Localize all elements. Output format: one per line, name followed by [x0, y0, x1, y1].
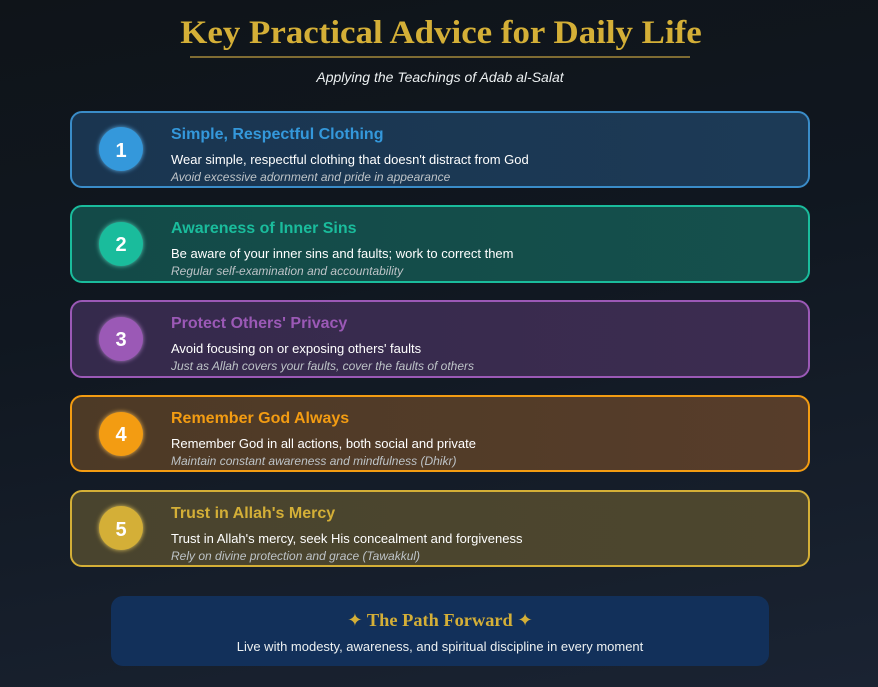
- closing heading: ✦ The Path Forward ✦: [347, 610, 533, 630]
- title: Key Practical Advice for Daily Life: [180, 15, 702, 51]
- number badge 1: [99, 127, 143, 171]
- note 4: Maintain constant awareness and mindfulness (Dhikr): [171, 454, 456, 468]
- heading 1: Simple, Respectful Clothing: [171, 126, 383, 143]
- number badge 5: [99, 506, 143, 550]
- subtitle: Applying the Teachings of Adab al-Salat: [316, 69, 564, 85]
- note 5: Rely on divine protection and grace (Tawakkul): [171, 549, 420, 563]
- number badge 2: 2: [115, 234, 127, 256]
- number badge 2: [99, 222, 143, 266]
- advice text 3: Avoid focusing on or exposing others' faults: [171, 341, 421, 356]
- panel: card 2 inner sins: [70, 205, 810, 283]
- panel: card 1 clothing: [70, 111, 810, 188]
- heading 2: Awareness of Inner Sins: [171, 220, 357, 237]
- heading 3: Protect Others' Privacy: [171, 315, 347, 332]
- note 2: Regular self-examination and accountability: [171, 264, 403, 278]
- panel: card 3 privacy: [70, 300, 810, 378]
- closing message: Live with modesty, awareness, and spiritual discipline in every moment: [237, 639, 643, 654]
- title underline: [190, 56, 690, 58]
- advice text 1: Wear simple, respectful clothing that doesn't distract from God: [171, 152, 529, 167]
- number badge 3: 3: [115, 329, 127, 351]
- advice text 2: Be aware of your inner sins and faults; work to correct them: [171, 246, 514, 261]
- heading 5: Trust in Allah's Mercy: [171, 505, 335, 522]
- number badge 1: 1: [115, 140, 127, 162]
- advice text 4: Remember God in all actions, both social and private: [171, 436, 476, 451]
- advice text 5: Trust in Allah's mercy, seek His concealment and forgiveness: [171, 531, 522, 546]
- number badge 4: [99, 412, 143, 456]
- number badge 3: [99, 317, 143, 361]
- heading 4: Remember God Always: [171, 410, 349, 427]
- panel: card 4 remember God: [70, 395, 810, 472]
- panel: card 5 trust: [70, 490, 810, 567]
- number badge 5: 5: [115, 519, 127, 541]
- panel: the path forward: [111, 596, 769, 666]
- note 1: Avoid excessive adornment and pride in appearance: [171, 170, 450, 184]
- number badge 4: 4: [115, 424, 127, 446]
- note 3: Just as Allah covers your faults, cover the faults of others: [171, 359, 474, 373]
